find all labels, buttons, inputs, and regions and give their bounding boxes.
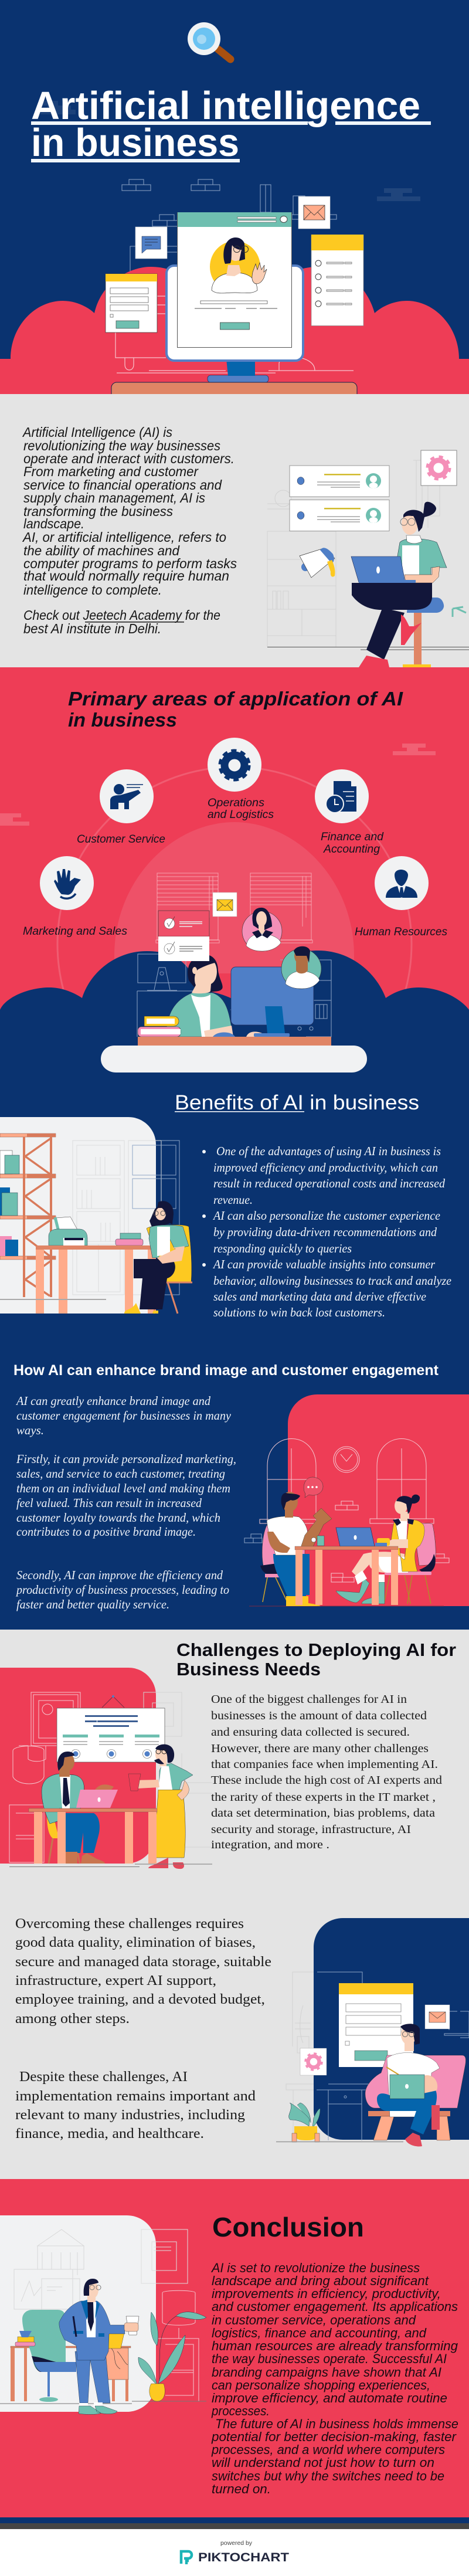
red cloud (0, 267, 469, 394)
cafe table (295, 1546, 398, 1605)
brand text: customer loyalty towards the brand, which (16, 1511, 220, 1525)
conclusion text: AI is set to revolutionize the business (210, 2261, 420, 2275)
heading (68, 688, 403, 731)
challenges text: One of the biggest challenges for AI in (211, 1693, 407, 1706)
panel: hero (0, 0, 469, 400)
intro text: the ability of machines and (23, 543, 180, 558)
man in armchair (365, 2024, 465, 2146)
challenges illustration panel (0, 1668, 212, 1869)
checklist card (158, 911, 209, 961)
conclusion text: branding campaigns have shown that AI (212, 2365, 441, 2380)
man with coffee (59, 2279, 139, 2414)
intro text: best AI institute in Delhi. (23, 621, 161, 636)
brand text: ways. (16, 1423, 44, 1437)
benefits list: sales and marketing data and derive effective (213, 1289, 426, 1304)
dome (114, 822, 354, 973)
plant (289, 2103, 320, 2142)
conclusion text: logistics, finance and accounting, and (212, 2326, 427, 2340)
profile portrait (210, 237, 267, 293)
item: operations and logistics (208, 738, 274, 821)
bookshelf (0, 1133, 56, 1297)
intro text: AI, or artificial intelligence, refers to (22, 530, 226, 545)
challenges text: integration, and more . (211, 1838, 329, 1851)
challenges heading (176, 1640, 456, 1679)
speech bubble (304, 1477, 323, 1498)
conclusion text: The future of AI in business holds immense (215, 2417, 458, 2431)
standing woman (128, 1745, 193, 1869)
desk and books (36, 1233, 156, 1314)
challenges text: that companies face when implementing AI. (211, 1758, 438, 1771)
overcoming illustration panel (276, 1918, 469, 2146)
mail card (425, 2005, 450, 2029)
monitor illustration (111, 212, 357, 400)
panel: challenges (0, 1630, 469, 2179)
conclusion text: turned on. (212, 2482, 271, 2496)
challenges text: However, there are many other challenges (211, 1742, 429, 1755)
benefits list: revenue. (213, 1193, 253, 1207)
panel: introduction (0, 394, 469, 667)
title: Artificial intelligence (31, 84, 420, 128)
benefits list: responding quickly to queries (213, 1241, 352, 1255)
stacked books (138, 1016, 181, 1037)
intro text: transforming the business (23, 504, 173, 519)
conclusion text: will understand not just how to turn on (212, 2455, 434, 2470)
benefits list: solutions to win back lost customers. (213, 1305, 385, 1319)
office illustration panel (0, 1117, 192, 1314)
despite text: Despite these challenges, AI (19, 2069, 188, 2085)
conclusion text: and customer engagement. Its applications (212, 2299, 458, 2314)
despite text: implementation remains important and (15, 2089, 256, 2104)
plant (138, 2312, 206, 2401)
faint office background (267, 460, 440, 647)
brand text: them on an individual level and making them (16, 1481, 230, 1495)
benefits list: AI can also personalize the customer experience (212, 1209, 440, 1223)
challenges heading: Challenges to Deploying AI for (176, 1640, 456, 1660)
intro text: revolutionizing the way businesses (23, 438, 220, 453)
challenges text: businesses is the amount of data collected (211, 1709, 427, 1722)
window blinds (156, 873, 312, 943)
item: finance and accounting (315, 769, 384, 856)
benefits list: improved efficiency and productivity, which can (213, 1160, 438, 1175)
overcoming text: secure and managed data storage, suitable (15, 1954, 271, 1970)
brand text: sales, and service to each customer, treating (16, 1467, 225, 1481)
office line art (137, 954, 331, 1037)
cafe illustration panel (244, 1394, 469, 1606)
brand text: Firstly, it can provide personalized marketing, (16, 1452, 236, 1466)
brand text: AI can greatly enhance brand image and (15, 1394, 210, 1408)
desk (138, 1037, 331, 1046)
intro text: From marketing and customer (23, 464, 199, 479)
conclusion text (210, 2261, 458, 2496)
yellow mail card (213, 892, 237, 917)
conclusion text: improvements in efficiency, productivity, (212, 2286, 441, 2301)
benefits list: One of the advantages of using AI in business is (216, 1144, 441, 1158)
conclusion text: processes, and a world where computers (211, 2442, 445, 2457)
intro text: Check out Jeetech Academy for the (23, 607, 220, 623)
conclusion text: potential for better decision-making, faster (211, 2429, 457, 2444)
conclusion illustration panel (0, 2215, 206, 2414)
item: operations and logistics: and Logistics (208, 809, 274, 821)
overcoming text: infrastructure, expert AI support, (15, 1973, 216, 1988)
icon: piktochart logo (181, 2551, 192, 2564)
intro text: supply chain management, AI is (23, 490, 205, 505)
item: marketing and sales (23, 856, 128, 938)
challenges text: the rarity of these experts in the IT market , (211, 1791, 436, 1804)
brand text: customer engagement for businesses in many (16, 1409, 232, 1423)
intro text (22, 425, 237, 636)
woman on stool with laptop (351, 502, 447, 667)
intro text: landscape. (23, 516, 84, 531)
brand heading: How AI can enhance brand image and customer engagement (13, 1362, 439, 1379)
brand text: contributes to a positive brand image. (16, 1525, 196, 1539)
benefits list: AI can provide valuable insights into consumer (212, 1257, 436, 1271)
pink avatar (242, 908, 282, 951)
teal arrow (453, 607, 466, 617)
woman with laptop (336, 1495, 436, 1604)
item: finance and accounting: Finance and (321, 831, 384, 843)
light pill (101, 1046, 367, 1073)
woman at computer (166, 955, 314, 1037)
footer branding: powered by (220, 2540, 252, 2547)
benefits list: result in reduced operational costs and increased (213, 1176, 445, 1190)
item: human resources: Human Resources (355, 926, 448, 938)
challenges text: and ensuring data collected is secured. (211, 1726, 410, 1739)
challenges text (211, 1693, 442, 1851)
benefits list: by providing data-driven recommendations and (213, 1225, 437, 1239)
title (31, 84, 431, 165)
conclusion text: improve efficiency, and automate routine (212, 2391, 447, 2405)
conclusion text: the way businesses operate. Successful AI (212, 2351, 447, 2366)
item: customer service (77, 769, 165, 846)
panel: navy section (0, 892, 469, 1642)
notification cards (290, 466, 389, 531)
challenges text: data set determination, bias problems, data (211, 1807, 435, 1820)
item: operations and logistics: Operations (208, 797, 265, 809)
icon: magnifying glass (188, 22, 230, 59)
panel: conclusion (0, 2179, 469, 2517)
challenges text: These include the high cost of AI experts and (211, 1774, 442, 1787)
desk line art (115, 296, 354, 373)
title: in business (31, 121, 239, 165)
form card (106, 274, 157, 332)
benefits heading: Benefits of AI in business (175, 1091, 419, 1114)
conclusion heading: Conclusion (212, 2212, 364, 2242)
intro text: that would normally require human (23, 568, 229, 583)
challenges heading: Business Needs (176, 1659, 321, 1679)
challenges text: security and storage, infrastructure, AI (211, 1823, 411, 1836)
list card (311, 235, 363, 326)
footer bars (0, 2517, 469, 2576)
conclusion text: can personalize shopping experiences, (212, 2378, 430, 2392)
woman on yellow chair (124, 1201, 192, 1314)
benefits list: behavior, allowing businesses to track and analyze (213, 1274, 451, 1288)
overcoming text (15, 1916, 271, 2027)
heading: Primary areas of application of AI (68, 688, 403, 710)
gear card (421, 450, 457, 486)
brand text: Secondly, AI can improve the efficiency and (16, 1568, 223, 1582)
gear card (300, 2048, 327, 2075)
heading: in business (68, 709, 177, 731)
conclusion text: human resources are already transforming (212, 2339, 458, 2353)
intro text: intelligence to complete. (23, 582, 162, 598)
despite text (15, 2069, 256, 2141)
panel: primary areas (0, 667, 469, 1121)
overcoming text: good data quality, elimination of biases, (15, 1935, 256, 1950)
benefits list (202, 1144, 451, 1319)
presentation board (57, 1695, 165, 1762)
seated man (42, 1752, 118, 1864)
icon: megaphone (300, 548, 335, 578)
conclusion text: processes. (211, 2404, 270, 2418)
mail card (298, 196, 330, 229)
item: marketing and sales: Marketing and Sales (23, 925, 128, 938)
overcoming text: among other steps. (15, 2011, 130, 2027)
meeting table (29, 1808, 157, 1864)
brand text: productivity of business processes, leading to (15, 1583, 229, 1597)
intro text: Artificial Intelligence (AI) is (22, 425, 172, 440)
intro text: computer programs to perform tasks (23, 556, 237, 571)
background bricks (122, 179, 337, 304)
despite text: finance, media, and healthcare. (15, 2126, 204, 2141)
brand text (15, 1394, 236, 1611)
overcoming text: Overcoming these challenges requires (15, 1916, 244, 1932)
brand text: faster and better quality service. (16, 1597, 169, 1611)
form card (339, 1983, 413, 2067)
despite text: relevant to many industries, including (15, 2107, 245, 2123)
teal avatar (281, 946, 321, 989)
conclusion text: in customer service, operations and (212, 2313, 416, 2327)
item: finance and accounting: Accounting (323, 843, 380, 856)
conclusion text: switches but why the switches need to be (212, 2469, 444, 2483)
item: customer service: Customer Service (77, 833, 165, 846)
conclusion text: landscape and bring about significant (212, 2273, 430, 2288)
printer (49, 1217, 87, 1245)
footer branding (181, 2540, 289, 2564)
intro text: service to financial operations and (23, 477, 222, 493)
item: human resources (355, 856, 448, 938)
intro text: operate and interact with customers. (23, 451, 235, 466)
footer branding: PIKTOCHART (198, 2551, 289, 2564)
brand text: feel valued. This can result in increased (16, 1496, 202, 1510)
desk and chair (11, 2310, 131, 2402)
chat card (135, 227, 167, 259)
overcoming text: employee training, and a devoted budget, (15, 1992, 265, 2007)
man on chair (260, 1492, 332, 1606)
